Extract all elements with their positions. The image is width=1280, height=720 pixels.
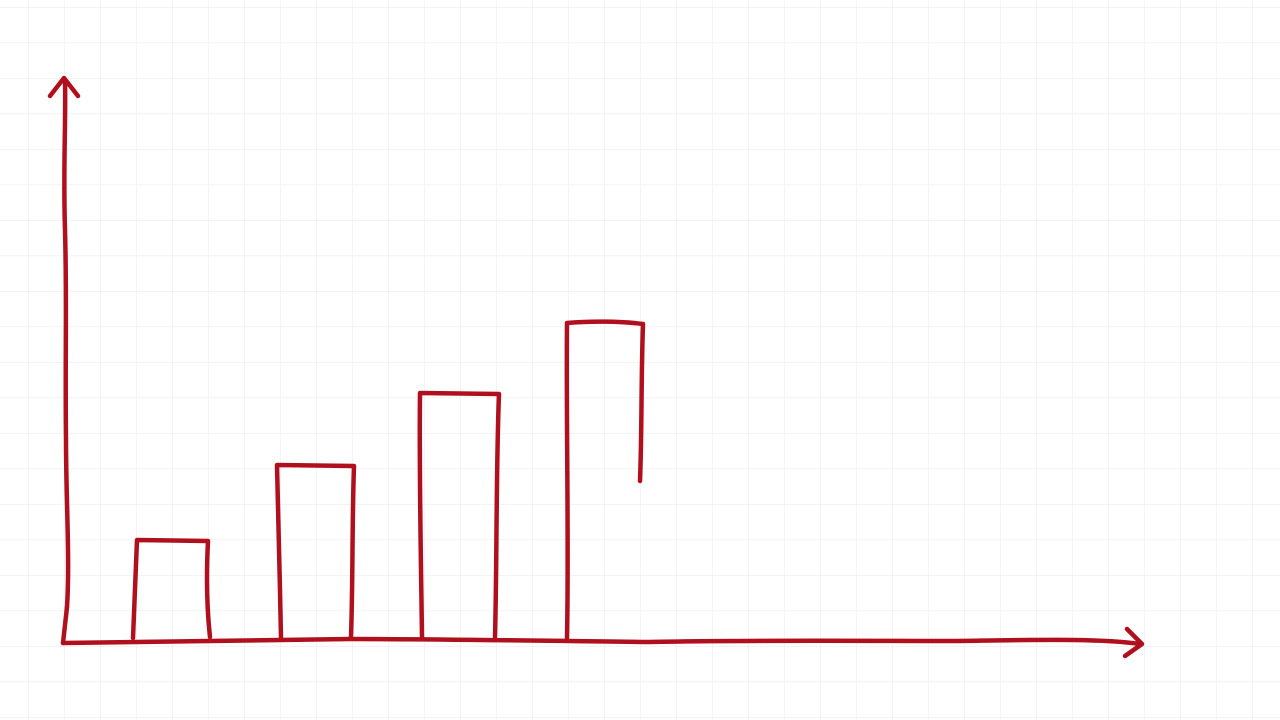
- bar 1: [133, 540, 210, 638]
- x axis with arrow: [63, 607, 1142, 656]
- bar 4 (incomplete): [567, 322, 643, 638]
- bar 2: [277, 465, 354, 638]
- bar 3: [420, 393, 499, 638]
- y axis with arrow: [50, 78, 78, 607]
